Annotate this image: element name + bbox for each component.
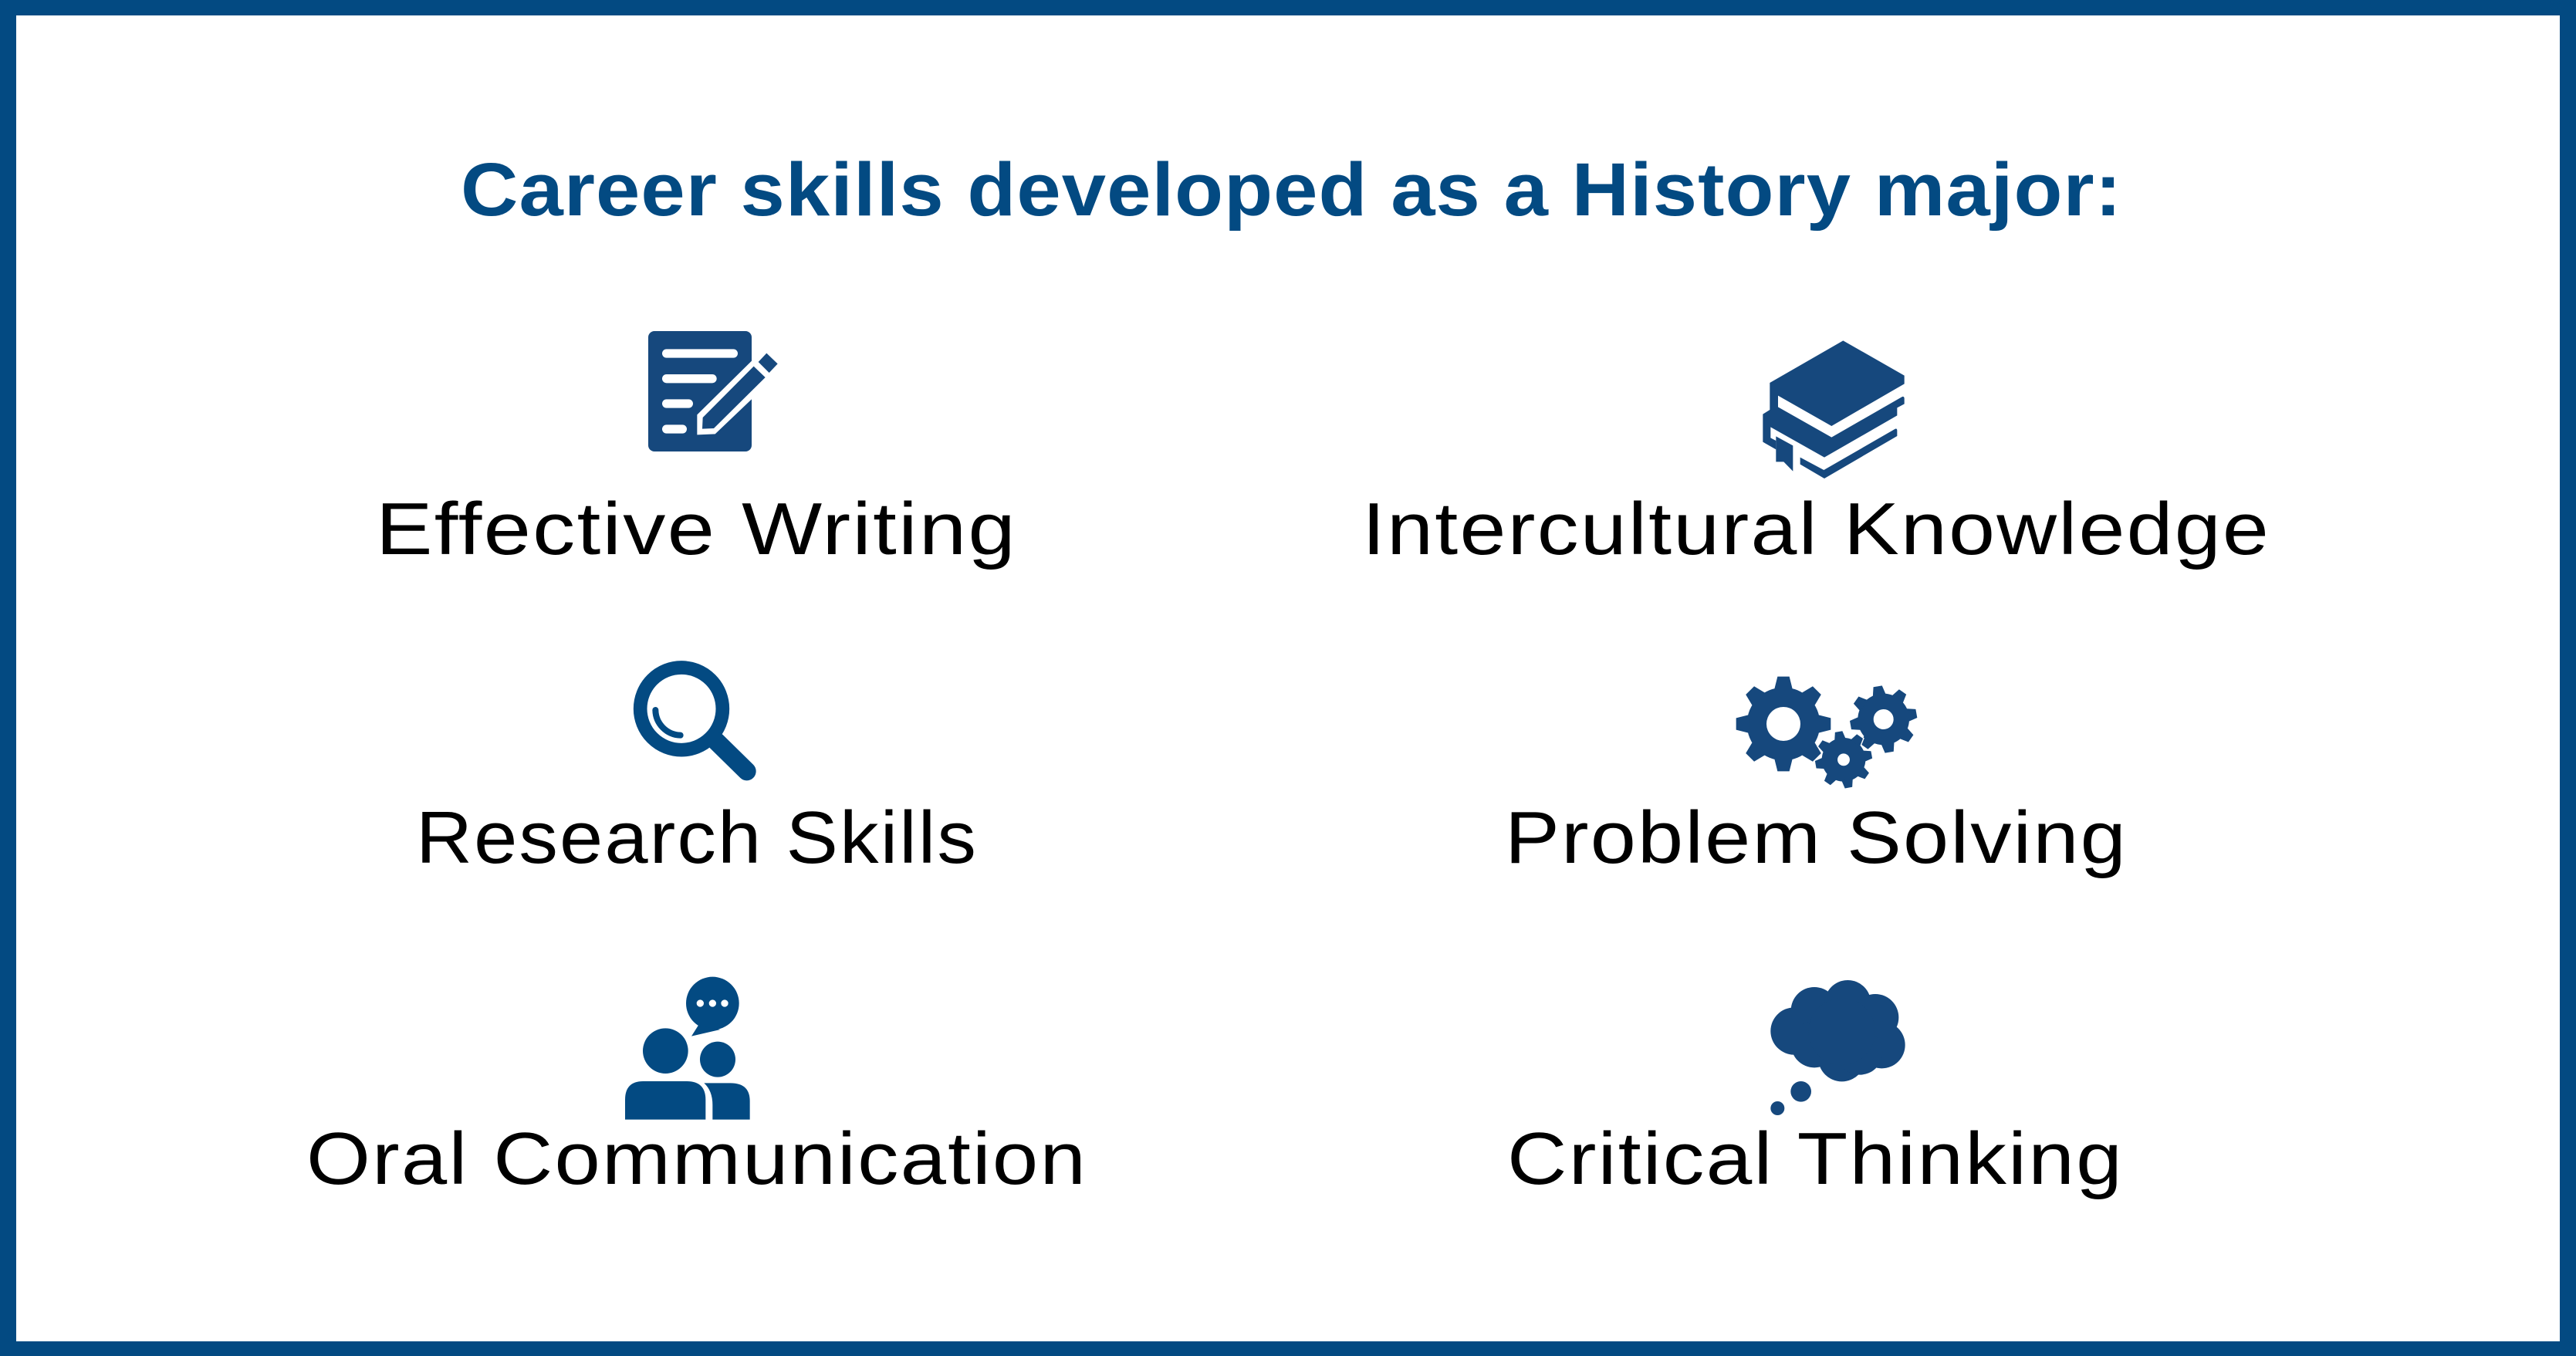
skill: Research Skills [416,668,978,879]
icon: document and pencil [648,331,778,451]
icon: magnifying glass [641,668,747,771]
label: Effective Writing [376,488,1017,570]
skill: Intercultural Knowledge [1362,340,2270,570]
skill: Effective Writing [376,331,1017,570]
label: Oral Communication [306,1118,1087,1200]
skill: Critical Thinking [1507,980,2124,1200]
icon: stack of books [1763,340,1905,478]
skill: Oral Communication [306,977,1087,1200]
icon: two people talking [625,977,750,1120]
title: Career skills developed as a History major: [461,147,2122,232]
skill: Problem Solving [1505,677,2128,879]
label: Problem Solving [1505,796,2128,879]
label: Critical Thinking [1507,1118,2124,1200]
icon: thought cloud [1770,980,1905,1115]
icon: gears [1736,677,1922,793]
label: Research Skills [416,796,978,879]
label: Intercultural Knowledge [1362,488,2270,570]
